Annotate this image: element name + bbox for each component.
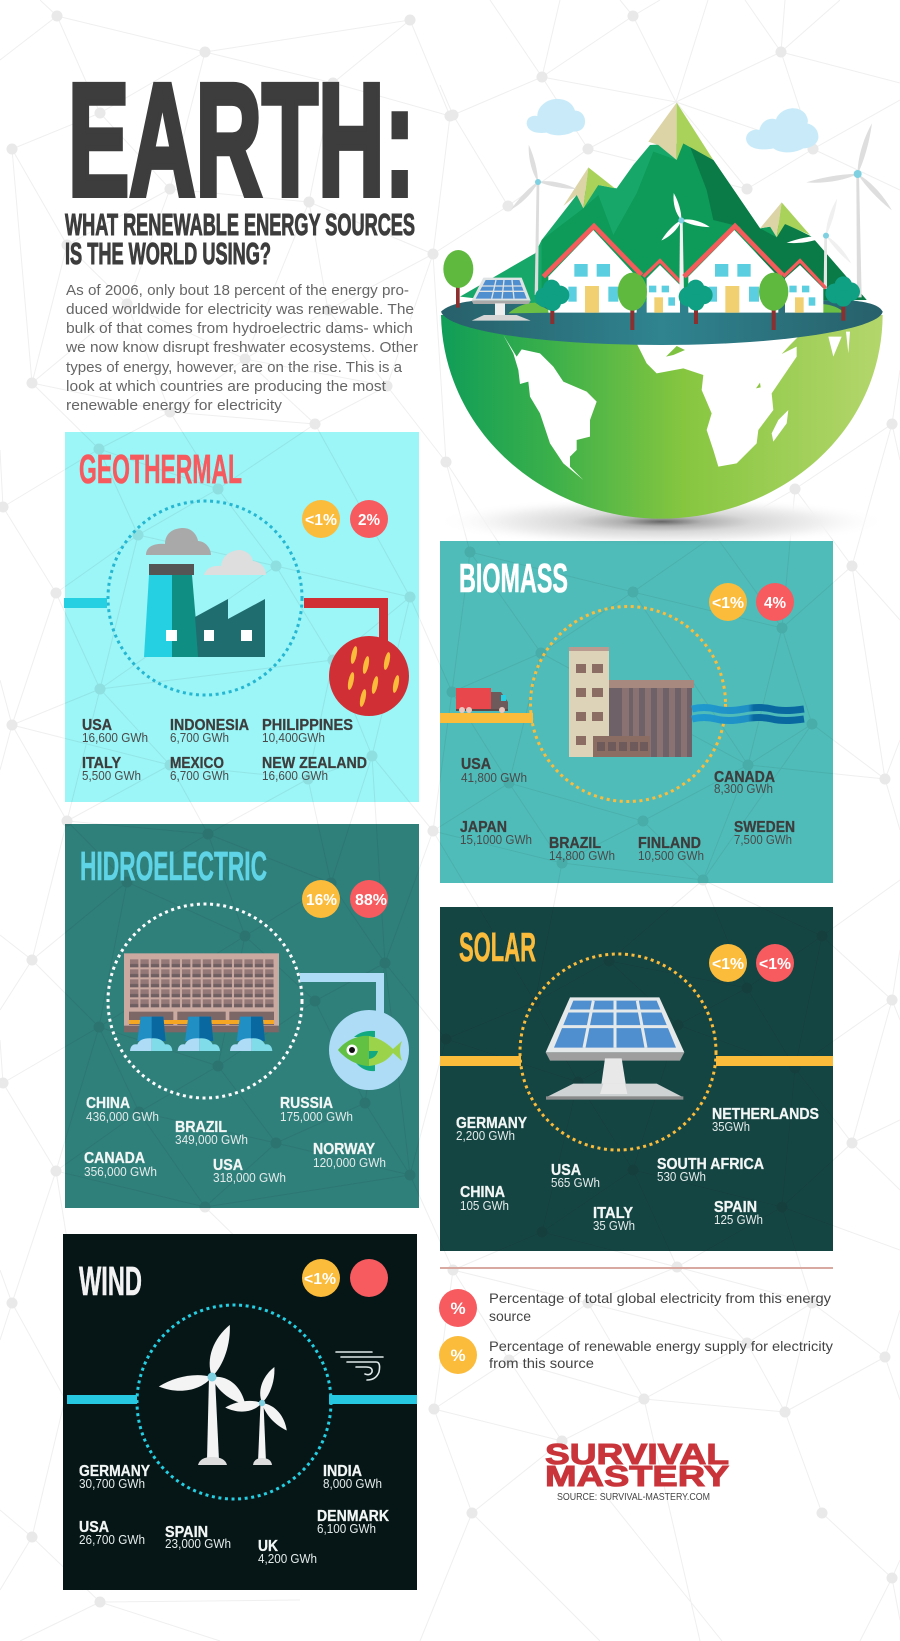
stat: Spain: SPAIN [714, 1199, 757, 1216]
stat: Canada: CANADA [714, 769, 775, 786]
stat: Italy [593, 1205, 635, 1233]
stat: Germany: GERMANY [456, 1115, 527, 1132]
stat: UK: UK [258, 1538, 278, 1555]
tree bushy 1 [535, 280, 569, 324]
intro text block: look at which countries are producing the most [66, 378, 387, 395]
stat: New Zealand [262, 755, 367, 783]
badge: global share: 4% [764, 595, 786, 612]
stat: China: CHINA [460, 1184, 505, 1201]
stat: Russia: 175,000 GWh [280, 1110, 353, 1124]
intro text block: bulk of that comes from hydroelectric dams- which [66, 320, 413, 337]
logo: Survival Mastery: SURVIVAL [545, 1439, 729, 1471]
source line: SOURCE: SURVIVAL-MASTERY.COM [557, 1491, 710, 1503]
icon: biomass plant [569, 647, 694, 757]
stat: Finland: FINLAND [638, 835, 701, 852]
stat: Spain [714, 1199, 763, 1227]
connector bar right [716, 1056, 833, 1066]
stat: USA: USA [79, 1519, 109, 1536]
stat: Canada [84, 1150, 157, 1179]
stat: Netherlands [712, 1106, 819, 1134]
stat: Indonesia: 6,700 GWh [170, 731, 229, 745]
icon: geothermal plant [144, 528, 266, 657]
stat: Germany: 30,700 GWh [79, 1477, 145, 1491]
cloud right [746, 108, 818, 152]
legend item: global share: source [489, 1308, 531, 1324]
stat: Canada: 8,300 GWh [714, 782, 773, 796]
badge: renewable share: <1% [304, 1271, 336, 1288]
water pipe [300, 973, 384, 1020]
badge: renewable share: <1% [305, 512, 337, 529]
stat: Spain [165, 1524, 231, 1551]
badge: global share [350, 500, 388, 538]
stat: Philippines: PHILIPPINES [262, 717, 353, 734]
stat: Indonesia [170, 717, 249, 745]
tree round middle [618, 273, 647, 330]
icon: fish [329, 1010, 409, 1090]
mountains [460, 103, 867, 303]
stat: Norway [313, 1141, 386, 1170]
stat: Sweden [734, 819, 795, 847]
stat: Italy: ITALY [82, 755, 121, 772]
intro text block: renewable energy for electricity [66, 397, 283, 414]
disc ground [441, 298, 883, 345]
stat: Brazil: BRAZIL [175, 1119, 227, 1136]
small house right [783, 261, 826, 313]
solar panel small [472, 278, 531, 321]
stat: USA: 318,000 GWh [213, 1171, 286, 1185]
badge: global share: 2% [358, 512, 380, 529]
connector bar left [67, 1395, 137, 1404]
wind turbine far left [510, 144, 577, 295]
intro text block [65, 282, 418, 414]
ground patch left [508, 303, 553, 313]
tree round right [759, 273, 788, 330]
stat: Netherlands: NETHERLANDS [712, 1106, 819, 1123]
legend [439, 1289, 833, 1374]
icon: water waves [692, 708, 804, 720]
icon: wind gust [336, 1352, 383, 1380]
stat: New Zealand: NEW ZEALAND [262, 755, 367, 772]
stat: New Zealand: 16,600 GWh [262, 769, 328, 783]
stat: USA [82, 717, 148, 745]
badge: renewable share [302, 500, 340, 538]
stat: USA [551, 1162, 600, 1190]
stat: Spain: SPAIN [165, 1524, 208, 1541]
panel: biomass [440, 541, 833, 883]
stat: Indonesia: INDONESIA [170, 717, 249, 734]
stat: Japan [460, 819, 532, 847]
dotted circle [137, 1305, 331, 1499]
dotted circle [108, 904, 302, 1098]
legend item: renewable share: % [450, 1346, 466, 1365]
stat: Norway: 120,000 GWh [313, 1156, 386, 1170]
stat: Philippines [262, 717, 353, 745]
badge: renewable share [709, 583, 747, 621]
stat: Germany: 2,200 GWh [456, 1129, 515, 1143]
stat: Germany [456, 1115, 527, 1143]
globe hemisphere [441, 315, 883, 519]
house right [684, 226, 783, 313]
heading: hidroelectric: HIDROELECTRIC [80, 843, 267, 889]
badge: renewable share [302, 880, 340, 918]
icon: truck [456, 688, 508, 713]
stat: Canada: CANADA [84, 1150, 145, 1167]
stat: Brazil [175, 1119, 248, 1147]
stat: China [86, 1095, 159, 1124]
legend item: global share [439, 1289, 831, 1327]
stat: USA [213, 1157, 286, 1185]
stat: Netherlands: 35GWh [712, 1120, 750, 1134]
stat: USA: 16,600 GWh [82, 731, 148, 745]
heading: biomass: BIOMASS [459, 555, 568, 601]
subtitle [65, 208, 415, 271]
stat: Italy: ITALY [593, 1205, 633, 1222]
outlet pipe [304, 598, 388, 645]
subtitle: WHAT RENEWABLE ENERGY SOURCES [65, 208, 415, 242]
stat: Italy: 5,500 GWh [82, 769, 141, 783]
logo: Survival Mastery: MASTERY [545, 1461, 729, 1493]
icon: dam [124, 953, 279, 1051]
badge: global share [756, 583, 794, 621]
stat: Japan: 15,1000 GWh [460, 833, 532, 847]
badge: renewable share: <1% [712, 595, 744, 612]
stat: USA: 41,800 GWh [461, 771, 527, 785]
heading: geothermal: GEOTHERMAL [79, 446, 242, 492]
stat: Russia [280, 1095, 353, 1124]
intro text block: As of 2006, only bout 18 percent of the energy pro- [66, 282, 409, 299]
stat: USA: 565 GWh [551, 1176, 600, 1190]
dotted circle [108, 501, 302, 695]
stat: Norway: NORWAY [313, 1141, 375, 1158]
connector bar left [440, 1056, 521, 1066]
icon: large turbine [158, 1322, 251, 1465]
stat: UK: 4,200 GWh [258, 1552, 317, 1566]
stat: Mexico: 6,700 GWh [170, 769, 229, 783]
stat: USA [79, 1519, 145, 1547]
road [440, 713, 533, 723]
legend item: global share: % [450, 1299, 466, 1318]
badge: global share (empty) [350, 1259, 388, 1297]
stat: Sweden: 7,500 GWh [734, 833, 792, 847]
stat: Russia: RUSSIA [280, 1095, 333, 1112]
globe shadow [435, 497, 888, 547]
stat: Mexico: MEXICO [170, 755, 224, 772]
icon: solar panel [546, 997, 684, 1100]
stat: Denmark: DENMARK [317, 1508, 389, 1525]
stat: China: CHINA [86, 1095, 130, 1112]
stat: Finland [638, 835, 704, 863]
badge: global share [756, 944, 794, 982]
heading: solar: SOLAR [459, 924, 536, 970]
tree bushy 3 [825, 276, 860, 321]
stat: Brazil: 349,000 GWh [175, 1133, 248, 1147]
stat: USA: USA [213, 1157, 243, 1174]
turbine small right [786, 198, 853, 289]
stat: Italy [82, 755, 141, 783]
stat: Finland: 10,500 GWh [638, 849, 704, 863]
stat: China: 105 GWh [460, 1199, 509, 1213]
badge: global share [350, 880, 388, 918]
panel: wind [63, 1234, 417, 1590]
ground patch right [822, 304, 844, 313]
stat: Sweden: SWEDEN [734, 819, 795, 836]
house left [543, 226, 642, 313]
stat: Spain: 23,000 GWh [165, 1537, 231, 1551]
stat: Denmark: 6,100 GWh [317, 1522, 376, 1536]
panel: hidroelectric [65, 824, 419, 1208]
stat: India [323, 1463, 382, 1491]
stat: USA: USA [82, 717, 112, 734]
turbine centre [660, 193, 711, 297]
stat: Mexico [170, 755, 229, 783]
intro text block: we now know disrupt freshwater ecosystems. Other [65, 339, 418, 356]
stat: South Africa: 530 GWh [657, 1170, 706, 1184]
logo: Survival Mastery [545, 1439, 729, 1493]
stat: Germany [79, 1463, 150, 1491]
intro text block: types of energy, however, are on the rise. This is a [66, 359, 403, 376]
stat: Canada [714, 769, 775, 796]
heading: wind: WIND [79, 1258, 142, 1304]
legend item: global share: Percentage of total global electricity from this energy [489, 1290, 831, 1306]
badge: renewable share: 16% [306, 892, 337, 909]
stat: Italy: 35 GWh [593, 1219, 635, 1233]
stat: Denmark [317, 1508, 389, 1536]
stat: USA: USA [551, 1162, 581, 1179]
stat: Canada: 356,000 GWh [84, 1165, 157, 1179]
stat: India: INDIA [323, 1463, 362, 1480]
stat: China [460, 1184, 509, 1213]
badge: renewable share [302, 1259, 340, 1297]
hero illustration: half globe with town [435, 99, 895, 547]
stat: Brazil [549, 835, 615, 863]
legend item: renewable share: from this source [489, 1355, 594, 1371]
stat: South Africa: SOUTH AFRICA [657, 1156, 764, 1173]
legend item: renewable share: Percentage of renewable energy supply for electricity [489, 1338, 833, 1354]
stat: Spain: 125 GWh [714, 1213, 763, 1227]
wind turbine far right [806, 122, 895, 297]
intro text block: duced worldwide for electricity was renewable. The [66, 301, 414, 318]
icon: small turbine [225, 1365, 292, 1465]
cloud left [527, 99, 585, 135]
tree bushy 2 [679, 280, 713, 324]
stat: Japan: JAPAN [460, 819, 507, 836]
panel: solar [440, 907, 833, 1251]
badge: global share: <1% [759, 956, 791, 973]
stat: Brazil: BRAZIL [549, 835, 601, 852]
connector bar right [329, 1395, 417, 1404]
title: EARTH: EARTH: [68, 50, 415, 229]
badge: renewable share: <1% [712, 956, 744, 973]
stat: South Africa [657, 1156, 764, 1184]
legend item: renewable share [439, 1336, 833, 1374]
continents [503, 332, 850, 480]
stat: India: 8,000 GWh [323, 1477, 382, 1491]
subtitle: IS THE WORLD USING? [65, 237, 271, 271]
stat: USA: 26,700 GWh [79, 1533, 145, 1547]
dotted circle [520, 954, 716, 1150]
dotted circle [530, 606, 726, 802]
stat: Brazil: 14,800 GWh [549, 849, 615, 863]
stat: China: 436,000 GWh [86, 1110, 159, 1124]
badge: global share: 88% [355, 892, 387, 909]
inlet pipe [64, 598, 107, 608]
tree round left [443, 250, 473, 308]
icon: magma ball [329, 636, 409, 716]
stat: Germany: GERMANY [79, 1463, 150, 1480]
small house [643, 261, 682, 313]
stat: USA [461, 756, 527, 785]
panel: geothermal [64, 432, 419, 802]
stat: UK [258, 1538, 317, 1566]
stat: Philippines: 10,400GWh [262, 731, 325, 745]
stat: USA: USA [461, 756, 491, 773]
badge: renewable share [709, 944, 747, 982]
